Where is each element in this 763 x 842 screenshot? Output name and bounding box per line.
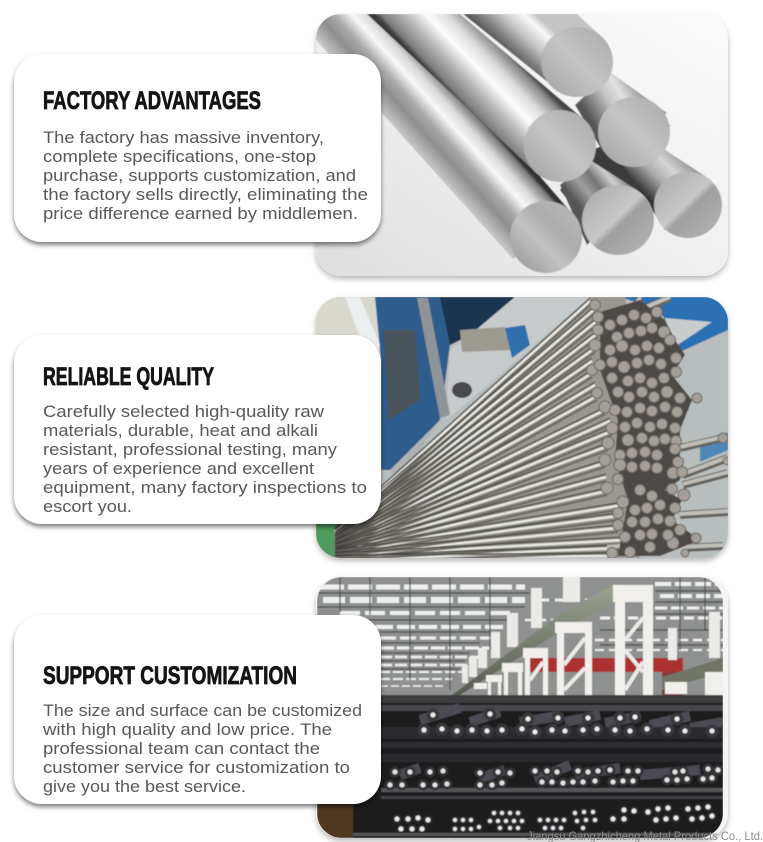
text card: [14, 335, 381, 524]
body text: purchase, supports customization, and: [43, 166, 356, 185]
stacked black steel bars: [317, 695, 723, 838]
photo frame shadow: [316, 297, 728, 558]
body text: escort you.: [43, 497, 132, 516]
body text: [42, 701, 362, 796]
body text: with high quality and low price. The: [42, 720, 332, 739]
photo: bundle of steel rods in workshop: [316, 297, 731, 563]
photo frame shadow: [316, 14, 728, 276]
body text: give you the best service.: [43, 777, 246, 796]
body text: professional team can contact the: [43, 739, 320, 758]
heading: FACTORY ADVANTAGES: [43, 87, 261, 115]
body text: Carefully selected high-quality raw: [43, 402, 325, 421]
body text: The size and surface can be customized: [43, 701, 362, 720]
photo: steel bar warehouse: [317, 577, 723, 838]
panel: support customization: [14, 577, 763, 842]
photo: polished steel round bars: [316, 14, 728, 276]
diagonal crane beam: [452, 583, 620, 695]
text card: [14, 54, 381, 242]
body text: years of experience and excellent: [43, 459, 314, 478]
body text: price difference earned by middlemen.: [43, 204, 358, 223]
photo frame shadow: [316, 577, 728, 838]
heading: RELIABLE QUALITY: [43, 363, 214, 391]
body text: customer service for customization to: [43, 758, 350, 777]
body text: complete specifications, one-stop: [43, 147, 316, 166]
body text: the factory sells directly, eliminating the: [43, 185, 368, 204]
body text: [43, 402, 367, 516]
body text: equipment, many factory inspections to: [43, 478, 367, 497]
panel: reliable quality: [14, 297, 731, 563]
body text: resistant, professional testing, many: [43, 440, 338, 459]
panel: factory advantages: [14, 14, 728, 276]
text card: [14, 615, 381, 804]
white factory columns: [474, 585, 723, 696]
body text: materials, durable, heat and alkali: [43, 421, 318, 440]
body text: [43, 128, 368, 223]
body text: The factory has massive inventory,: [43, 128, 324, 147]
heading: SUPPORT CUSTOMIZATION: [43, 662, 297, 690]
